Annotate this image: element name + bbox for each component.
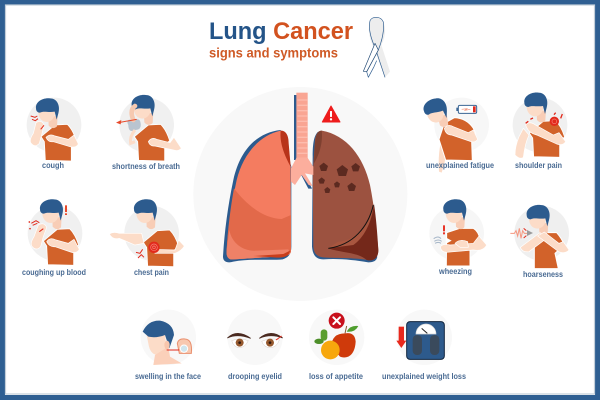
- symptom: shoulder pain: shoulder pain: [515, 160, 562, 170]
- symptom: wheezing: wheezing: [438, 266, 472, 276]
- symptom: loss of appetite: loss of appetite: [309, 371, 363, 381]
- central lungs panel: [193, 17, 407, 301]
- title: Lung Cancer: [209, 18, 353, 45]
- symptom: cough: cough: [42, 160, 64, 170]
- title: [209, 18, 353, 60]
- right lung: [312, 131, 378, 262]
- symptom: coughing up blood: coughing up blood: [22, 267, 86, 277]
- symptom: chest pain: [109, 199, 184, 277]
- symptom: chest pain: chest pain: [134, 267, 169, 277]
- symptom: cough: [27, 98, 81, 170]
- symptom: unexplained fatigue: [422, 97, 494, 173]
- icon: awareness ribbon: [363, 17, 390, 77]
- symptom: shortness of breath: [112, 95, 181, 171]
- symptom: swelling in the face: swelling in the face: [135, 371, 201, 381]
- symptom: swelling in the face: [135, 310, 201, 381]
- symptom: coughing up blood: [22, 199, 86, 277]
- left lung: [223, 130, 291, 262]
- trachea and bronchi: [291, 93, 313, 189]
- symptom: shortness of breath: shortness of breath: [112, 161, 180, 171]
- title: signs and symptoms: [209, 46, 338, 60]
- symptom: unexplained weight loss: unexplained weight loss: [382, 371, 466, 381]
- symptom: loss of appetite: [309, 310, 364, 381]
- symptom: wheezing: [429, 199, 487, 276]
- symptom: hoarseness: hoarseness: [523, 269, 563, 279]
- symptom: shoulder pain: [513, 93, 567, 170]
- icon: warning triangle: [322, 106, 340, 122]
- symptom: drooping eyelid: [227, 310, 283, 381]
- symptom: unexplained fatigue: unexplained fatigue: [426, 160, 494, 170]
- tumours: [318, 163, 360, 193]
- symptom: drooping eyelid: drooping eyelid: [228, 371, 282, 381]
- symptom: hoarseness: [510, 205, 569, 279]
- symptom: unexplained weight loss: [382, 310, 466, 381]
